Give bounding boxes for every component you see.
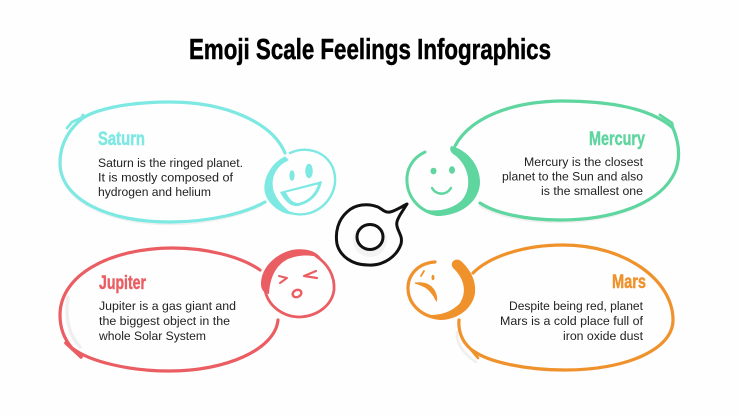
- heading: Jupiter: Jupiter: [99, 273, 146, 294]
- heading: Saturn: Saturn: [98, 129, 145, 150]
- panel: Mercury: [407, 101, 679, 222]
- panel: Jupiter: [60, 248, 334, 371]
- speech bubble outline: Jupiter: [60, 248, 278, 371]
- title: Emoji Scale Feelings Infographics: [189, 34, 551, 66]
- text block: Saturn: Saturn is the ringed planet.: [98, 156, 243, 170]
- speech bubble outline: Mars: [457, 245, 673, 370]
- center icon: speech bubble ring: [336, 204, 407, 265]
- text block: Mercury: is the smallest one: [541, 184, 643, 198]
- text block: Mars: [500, 299, 644, 343]
- text block: Mercury: Mercury is the closest: [524, 155, 644, 169]
- text block: Saturn: [98, 156, 243, 199]
- text block: Saturn: It is mostly composed of: [98, 170, 234, 184]
- panel: Saturn: [60, 102, 335, 224]
- heading: Mercury: Mercury: [589, 129, 645, 150]
- text block: Saturn: hydrogen and helium: [98, 185, 211, 199]
- icon: smiling face: [407, 146, 480, 216]
- icon: laughing face: [265, 150, 335, 214]
- speech bubble outline: Saturn: [60, 102, 285, 224]
- text block: Mars: Mars is a cold place full of: [500, 314, 644, 328]
- text block: Mercury: [502, 155, 644, 198]
- icon: sad face: [408, 260, 475, 320]
- icon: squinting face: [261, 249, 334, 317]
- text block: Mars: iron oxide dust: [563, 329, 644, 343]
- text block: Jupiter: [98, 299, 236, 343]
- speech bubble outline: Mercury: [455, 101, 679, 222]
- text block: Jupiter: whole Solar System: [98, 329, 206, 343]
- heading: Mars: Mars: [612, 272, 646, 293]
- text block: Mercury: planet to the Sun and also: [502, 170, 643, 184]
- text block: Mars: Despite being red, planet: [509, 299, 644, 313]
- panel: Mars: [408, 245, 673, 370]
- text block: Jupiter: the biggest object in the: [99, 314, 230, 328]
- text block: Jupiter: Jupiter is a gas giant and: [99, 299, 236, 313]
